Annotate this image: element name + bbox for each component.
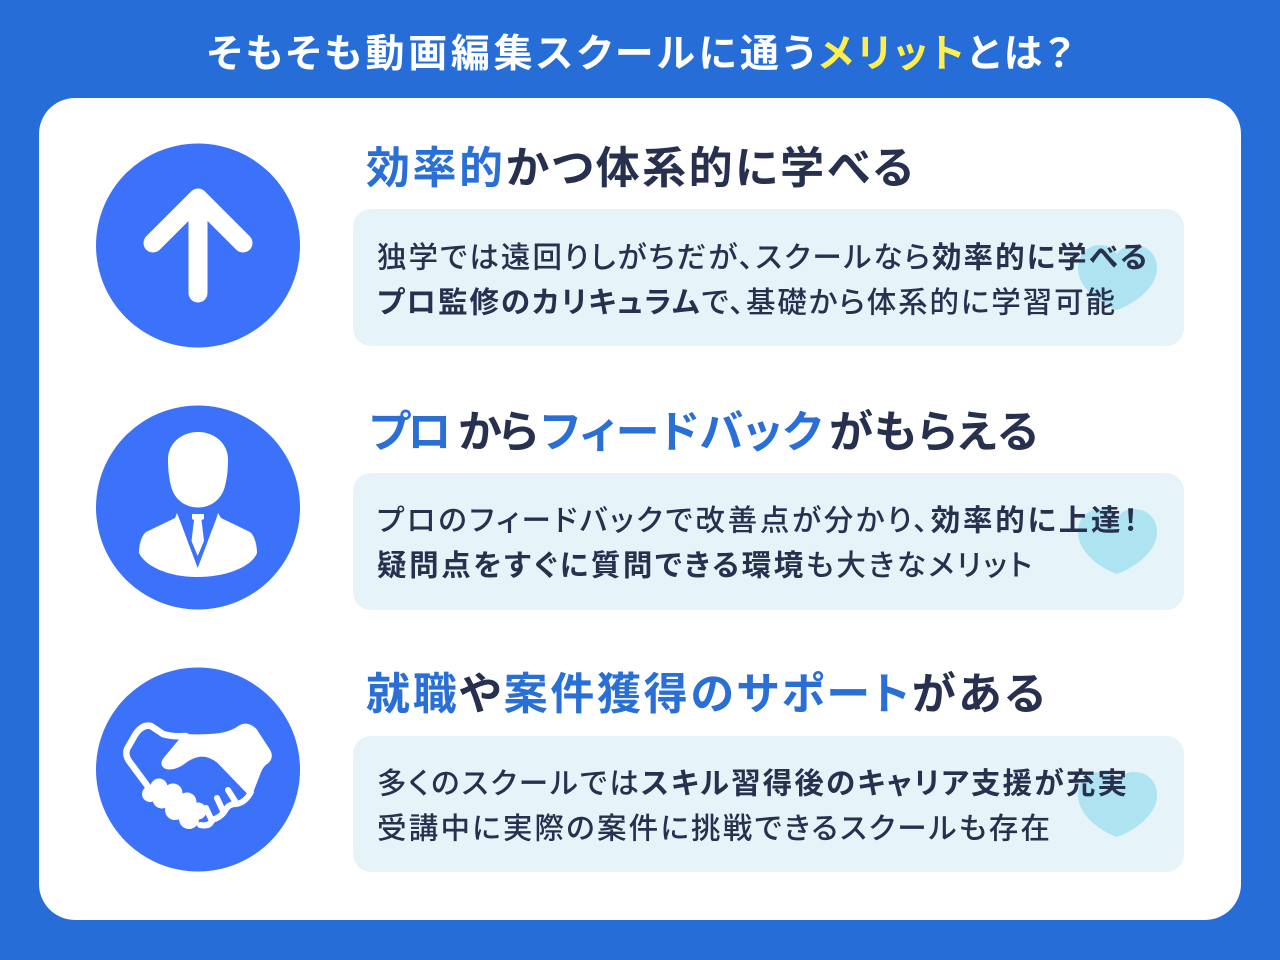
heading: merit 2: フィードバック [541, 408, 822, 457]
description box 1 [353, 209, 1184, 346]
description text 1: プロ監修のカリキュラムで、基礎から体系的に学習可能 [377, 286, 1115, 320]
panel: merit 2 feedback [96, 406, 1184, 610]
description text 1 [377, 242, 1147, 320]
description text 3 [377, 766, 1127, 846]
description text 2 [377, 504, 1138, 582]
heading: merit 2 [369, 408, 1038, 457]
icon: businessman in circle [96, 406, 300, 610]
description box 3 [353, 736, 1184, 872]
icon: heart decoration 2 [1078, 509, 1157, 574]
panel: merit 1 efficient learning [96, 144, 1184, 348]
description text 2: 疑問点をすぐに質問できる環境も大きなメリット [377, 550, 1032, 582]
icon: handshake in circle [96, 668, 300, 872]
panel: merit 3 career support [96, 668, 1184, 872]
heading: merit 1: 効率的かつ体系的に学べる [366, 144, 913, 193]
heading: merit 3: 就職や案件獲得のサポートがある [366, 670, 1045, 719]
description text 3: 受講中に実際の案件に挑戦できるスクールも存在 [377, 812, 1050, 846]
description box 2 [353, 473, 1184, 610]
title: そもそも動画編集スクールに通うメリットとは？ [207, 33, 1073, 76]
description text 1: 独学では遠回りしがちだが、スクールなら効率的に学べる [377, 242, 1147, 274]
description text 3: 多くのスクールではスキル習得後のキャリア支援が充実 [377, 766, 1127, 800]
icon: heart decoration 1 [1078, 245, 1157, 310]
description text 2: プロのフィードバックで改善点が分かり、効率的に上達！ [377, 504, 1138, 538]
heading: merit 2: プロ [369, 408, 452, 457]
heading: merit 2: から [458, 408, 538, 457]
heading: merit 2: がもらえる [829, 408, 1038, 457]
icon: heart decoration 3 [1078, 772, 1157, 837]
icon: up arrow in circle [96, 144, 300, 348]
